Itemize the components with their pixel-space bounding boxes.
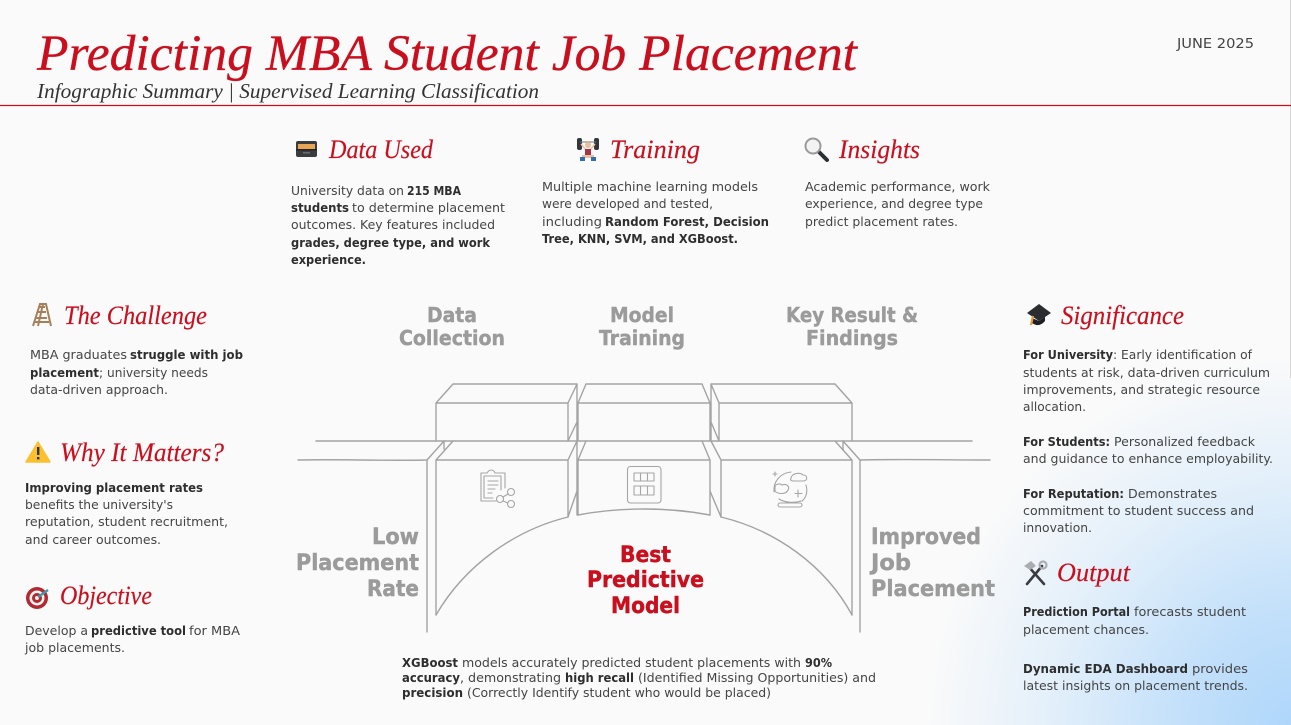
icon: crystal ball xyxy=(773,472,807,507)
icon: magnifier xyxy=(806,138,827,160)
left label: Rate xyxy=(367,577,419,602)
panel: why it matters xyxy=(25,438,228,547)
results text: XGBoost xyxy=(402,655,458,670)
center label: Model xyxy=(611,594,680,619)
text block: Improving placement rates xyxy=(25,480,203,495)
text block: experience. xyxy=(291,252,366,267)
results text: precision xyxy=(402,685,463,700)
pillar headings: Key Result & xyxy=(786,303,918,327)
text block: MBA graduates xyxy=(30,347,127,362)
center label xyxy=(587,543,704,619)
text block: Academic performance, work xyxy=(805,179,991,194)
text block: Multiple machine learning models xyxy=(542,179,758,194)
heading: Insights xyxy=(838,135,920,164)
right label: Improved xyxy=(871,525,981,550)
text block: grades, degree type, and work xyxy=(291,235,491,250)
text block: Personalized feedback xyxy=(1114,434,1256,449)
panel: the challenge xyxy=(30,301,243,397)
icon: graduation cap xyxy=(1027,304,1051,325)
text block: For University xyxy=(1023,347,1113,362)
upper block right xyxy=(711,384,852,441)
icon: weightlifter xyxy=(577,138,599,161)
text block: 215 MBA xyxy=(407,183,461,198)
text block: commitment to student success and xyxy=(1023,503,1254,518)
pillar headings: Model xyxy=(610,303,674,327)
text block xyxy=(805,179,991,229)
text block: provides xyxy=(1192,661,1248,676)
text block: to determine placement xyxy=(352,200,505,215)
results text: 90% xyxy=(805,655,833,670)
text block: students at risk, data-driven curriculum xyxy=(1023,365,1270,380)
icon: tools xyxy=(1024,561,1046,584)
results text: , demonstrating xyxy=(460,670,561,685)
panel: training xyxy=(542,135,769,246)
heading: Training xyxy=(610,135,700,164)
results text: models accurately predicted student placements with xyxy=(462,655,801,670)
text block: Random Forest, Decision xyxy=(605,214,769,229)
panel: objective xyxy=(24,581,241,655)
pillar headings: Collection xyxy=(399,326,505,350)
text block: University data on xyxy=(291,183,404,198)
lower arch stone middle xyxy=(578,441,710,515)
text block: and guidance to enhance employability. xyxy=(1023,451,1273,466)
icon: clipboard network xyxy=(481,470,514,508)
text block: forecasts student xyxy=(1134,604,1246,619)
text block: For Reputation: xyxy=(1023,486,1124,501)
text block xyxy=(25,480,228,547)
panel: insights xyxy=(805,135,991,229)
text block: predictive tool xyxy=(91,623,186,638)
center label: Best xyxy=(620,543,671,568)
text block xyxy=(1023,347,1273,535)
text block: and career outcomes. xyxy=(25,532,161,547)
right label: Job xyxy=(869,551,911,576)
heading: The Challenge xyxy=(64,301,207,330)
panel: data used xyxy=(291,135,505,267)
pillar headings: Findings xyxy=(806,326,898,350)
text block: job placements. xyxy=(24,640,125,655)
text block: : Early identification of xyxy=(1113,347,1253,362)
text block xyxy=(291,183,505,267)
text block: outcomes. Key features included xyxy=(291,217,495,232)
heading: Objective xyxy=(60,581,152,610)
heading: Significance xyxy=(1061,301,1184,330)
heading: Data Used xyxy=(328,135,434,164)
text block: for MBA xyxy=(189,623,241,638)
lower arch stone left xyxy=(436,441,577,615)
text block: innovation. xyxy=(1023,520,1092,535)
heading: Output xyxy=(1057,558,1131,587)
results text: (Identified Missing Opportunities) and xyxy=(638,670,876,685)
right label xyxy=(869,525,995,602)
panel: output xyxy=(1023,558,1248,693)
text block: struggle with job xyxy=(130,347,243,362)
bridge diagram xyxy=(298,384,990,632)
icon: file box xyxy=(296,141,317,157)
left label xyxy=(296,525,419,602)
date: JUNE 2025 xyxy=(1176,36,1254,52)
results text: high recall xyxy=(565,670,634,685)
icon: target xyxy=(26,587,48,609)
left label: Placement xyxy=(296,551,419,576)
text block: improvements, and strategic resource xyxy=(1023,382,1260,397)
text block: latest insights on placement trends. xyxy=(1023,678,1248,693)
heading: Why It Matters? xyxy=(60,438,224,467)
title: Predicting MBA Student Job Placement xyxy=(36,26,859,82)
text block: For Students: xyxy=(1023,434,1110,449)
text block: experience, and degree type xyxy=(805,196,983,211)
text block: benefits the university's xyxy=(25,497,173,512)
text block: Dynamic EDA Dashboard xyxy=(1023,661,1188,676)
text block: reputation, student recruitment, xyxy=(25,514,228,529)
text block: Prediction Portal xyxy=(1023,604,1130,619)
text block xyxy=(24,623,241,655)
text block: placement xyxy=(30,365,99,380)
results text: accuracy xyxy=(402,670,460,685)
right label: Placement xyxy=(871,577,995,602)
text block: Demonstrates xyxy=(1128,486,1217,501)
pillar headings xyxy=(399,303,918,350)
panel: significance xyxy=(1023,301,1273,535)
text block: predict placement rates. xyxy=(805,214,958,229)
text block: Tree, KNN, SVM, and XGBoost. xyxy=(542,231,738,246)
pillar headings: Training xyxy=(599,326,685,350)
text block: were developed and tested, xyxy=(542,196,713,211)
center label: Predictive xyxy=(587,568,704,593)
icon: ladder xyxy=(33,304,51,326)
icon: warning xyxy=(26,442,50,462)
text block: ; university needs xyxy=(99,365,208,380)
upper block left xyxy=(436,384,577,441)
subtitle: Infographic Summary | Supervised Learning Classification xyxy=(36,79,539,103)
text block xyxy=(542,179,769,246)
pillar headings: Data xyxy=(427,303,477,327)
results text: (Correctly Identify student who would be placed) xyxy=(467,685,771,700)
text block: students xyxy=(291,200,349,215)
text block: including xyxy=(542,214,602,229)
lower arch stone right xyxy=(710,441,852,615)
text block xyxy=(1023,604,1248,693)
icon: table grid xyxy=(628,466,661,503)
text block: allocation. xyxy=(1023,399,1086,414)
text block: data-driven approach. xyxy=(30,382,168,397)
text block: placement chances. xyxy=(1023,622,1149,637)
text block xyxy=(30,347,243,397)
left label: Low xyxy=(372,525,419,550)
results text xyxy=(402,655,876,700)
upper block middle xyxy=(578,384,710,441)
text block: Develop a xyxy=(25,623,88,638)
